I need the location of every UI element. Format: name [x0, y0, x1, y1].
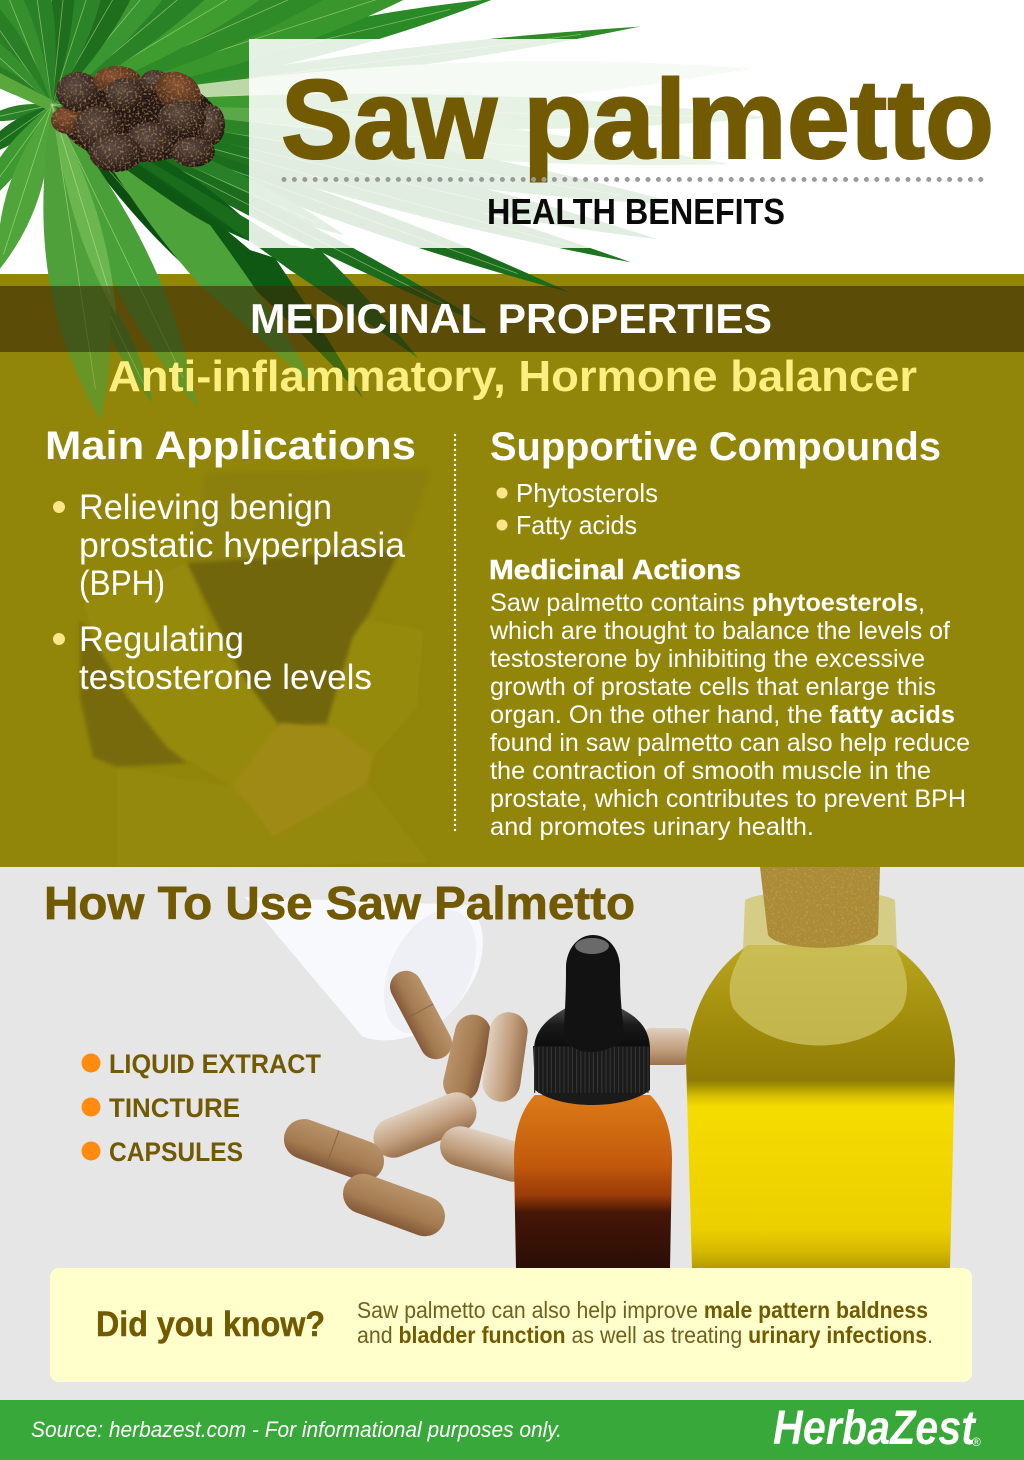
white pill cup: [245, 895, 495, 1049]
palm frond: [0, 0, 772, 425]
medicinal actions text: which are thought to balance the levels of: [489, 617, 950, 645]
form: liquid extract: LIQUID EXTRACT: [109, 1049, 321, 1079]
application list item 1: (BPH): [79, 564, 165, 603]
heading: medicinal properties: MEDICINAL PROPERTIES: [250, 295, 772, 342]
subtitle: HEALTH BENEFITS: [487, 191, 785, 232]
panel: medicinal properties background: [0, 274, 1024, 867]
source note: Source: herbazest.com - For informational purposes only.: [31, 1417, 562, 1442]
application list item 1: prostatic hyperplasia: [79, 526, 406, 565]
callout text: [357, 1297, 933, 1348]
title: Saw palmetto: [281, 57, 994, 182]
capsule 8: [645, 1028, 689, 1065]
medicinal actions text: growth of prostate cells that enlarge this: [490, 673, 936, 701]
application list item 2: Regulating: [79, 620, 244, 659]
title panel: [249, 39, 1024, 248]
application list item 2: testosterone levels: [79, 658, 372, 697]
medicinal actions text: Saw palmetto contains phytoesterols,: [490, 589, 925, 617]
medicinal actions text: prostate, which contributes to prevent BPH: [490, 785, 966, 813]
application list item 2: [53, 620, 372, 697]
panel: how to use background: [0, 867, 1024, 1400]
compound list: [496, 478, 658, 540]
heading: main applications: Main Applications: [45, 424, 416, 468]
capsule 2: [440, 1011, 494, 1105]
title: Saw palmetto: Saw: [281, 57, 498, 182]
dotted divider: [284, 177, 990, 182]
heading: medicinal actions: Medicinal Actions: [489, 554, 741, 585]
form: tincture: TINCTURE: [109, 1093, 240, 1123]
logo: HerbaZest: HerbaZest: [773, 1402, 977, 1455]
medicinal actions text: the contraction of smooth muscle in the: [490, 757, 931, 785]
heading: how to use: How To Use Saw Palmetto: [44, 877, 635, 929]
medicinal actions text: and promotes urinary health.: [490, 813, 814, 841]
properties subheading: Anti-inflammatory, Hormone balancer: [108, 352, 917, 401]
callout text: and bladder function as well as treating urinary infections.: [357, 1322, 933, 1348]
form: capsules: CAPSULES: [109, 1137, 243, 1167]
oil bottle: [686, 867, 955, 1268]
callout: did you know: [50, 1268, 972, 1382]
top white background: [0, 0, 1024, 274]
capsule 5: [435, 1122, 539, 1186]
capsule 4: [367, 1086, 483, 1164]
callout heading: Did you know?: [96, 1305, 325, 1344]
compound list: Phytosterols: [516, 478, 658, 508]
callout text: Saw palmetto can also help improve male pattern baldness: [357, 1297, 928, 1323]
background image: man holding lower abdomen: [80, 470, 430, 867]
capsule 7: [337, 1168, 451, 1242]
capsule 1: [384, 965, 458, 1065]
list of forms: [82, 1049, 321, 1167]
medicinal actions text: testosterone by inhibiting the excessive: [490, 645, 925, 673]
saw palmetto berries: [51, 64, 225, 172]
medicinal actions text: [489, 589, 970, 841]
heading band: [0, 286, 1024, 352]
medicinal actions text: organ. On the other hand, the fatty acids: [490, 701, 955, 729]
application list item 1: Relieving benign: [79, 488, 332, 527]
compound list: Fatty acids: [516, 510, 637, 540]
logo: HerbaZest: ®: [972, 1435, 981, 1449]
heading: supportive compounds: Supportive Compounds: [490, 425, 941, 469]
column: main applications: [45, 424, 416, 697]
column: supportive compounds: [489, 425, 970, 841]
capsule 3: [480, 1010, 530, 1104]
capsules: [278, 965, 689, 1242]
capsule 6: [278, 1113, 390, 1187]
application list item 1: [53, 488, 406, 603]
title: Saw palmetto: palmetto: [523, 57, 994, 182]
amber dropper bottle: [514, 935, 672, 1268]
medicinal actions text: found in saw palmetto can also help reduce: [490, 729, 970, 757]
footer bar: [0, 1400, 1024, 1460]
